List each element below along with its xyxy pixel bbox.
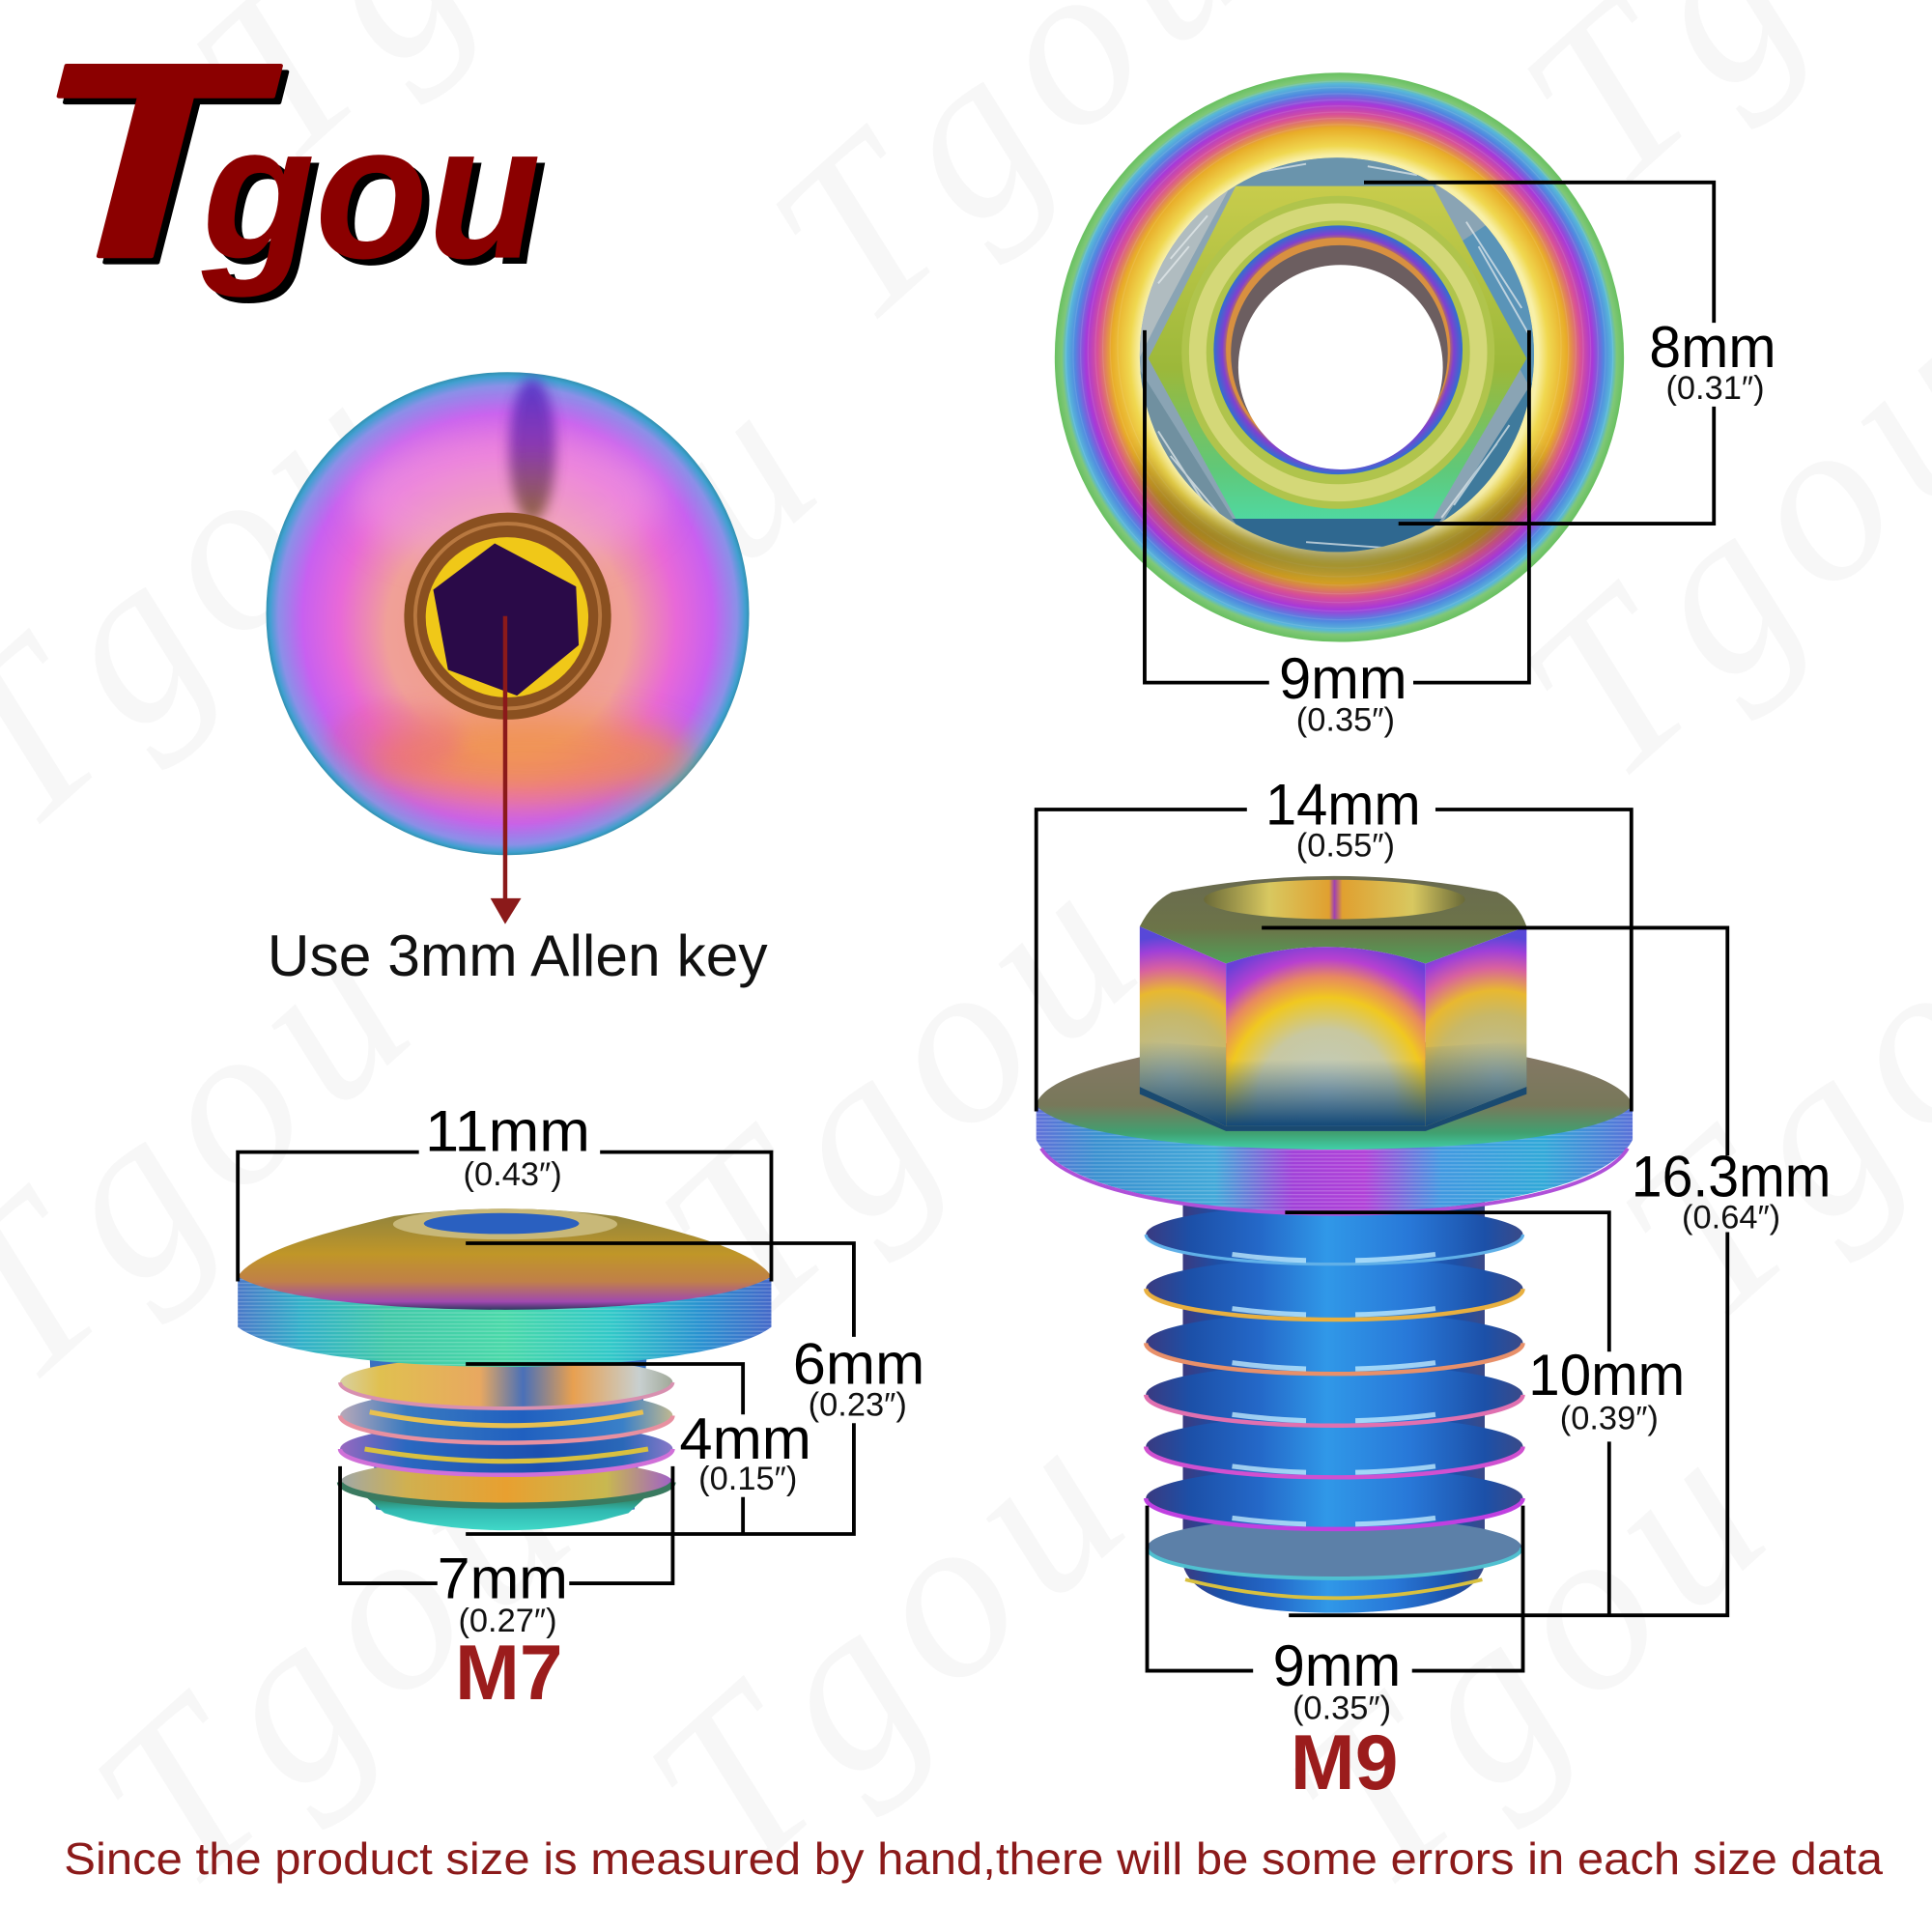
logo: Tgou: T — [33, 5, 283, 315]
dimensions: M9 16.3mm — [1262, 927, 1831, 1615]
nut inner iridescent ring — [1213, 225, 1463, 474]
dimensions: M7 6mm: 6mm — [793, 1331, 924, 1396]
dimensions: nut 8mm: 8mm — [1649, 315, 1776, 380]
dimensions: M9 9mm: (0.35″) — [1293, 1690, 1391, 1726]
M9 flange top — [1037, 1038, 1633, 1150]
M7 domed head — [238, 1208, 771, 1310]
dimensions: nut 8mm — [1364, 183, 1776, 524]
dimensions: M7 7mm: 7mm — [438, 1546, 568, 1610]
hex socket — [433, 543, 579, 696]
M7 end cap — [366, 1497, 645, 1530]
dimensions: M9 9mm: 9mm — [1273, 1634, 1401, 1698]
dimensions: M9 16.3mm: 16.3mm — [1632, 1145, 1831, 1209]
dimensions: M7 7mm — [340, 1466, 672, 1639]
panel: M7 bolt head top view — [267, 372, 750, 855]
logo: Tgou: gou — [201, 85, 541, 298]
nut outer iridescent flange — [1055, 72, 1624, 642]
watermark pattern: Tgou — [1241, 1375, 1823, 1932]
dimensions: M9 10mm: (0.39″) — [1560, 1401, 1659, 1437]
M7 threaded core — [370, 1355, 647, 1519]
dimensions: nut 8mm: (0.31″) — [1665, 370, 1765, 407]
footer note: Since the product size is measured by hand,there will be some errors in each size data — [64, 1833, 1883, 1884]
dimensions: M7 4mm: (0.15″) — [698, 1461, 797, 1497]
label: M7: M7 — [455, 1630, 563, 1717]
dimensions: nut 9mm: (0.35″) — [1296, 701, 1395, 738]
dimensions: M7 4mm: 4mm — [679, 1406, 811, 1471]
M9 end chamfer line — [1185, 1579, 1482, 1598]
socket bronze ring — [404, 513, 611, 720]
dimensions: M7 11mm: 11mm — [425, 1098, 590, 1163]
panel: M9 bolt side view — [1037, 876, 1633, 1613]
dimensions: M7 6mm: (0.23″) — [809, 1387, 907, 1424]
watermark pattern: Tgou — [612, 809, 1195, 1369]
M9 threads — [1146, 1205, 1523, 1578]
M7 threads — [340, 1356, 672, 1506]
M7 flange band — [238, 1276, 771, 1367]
dimensions: M7 4mm — [466, 1364, 811, 1534]
M9 thread core — [1182, 1202, 1485, 1613]
logo: Tgou: gou — [209, 91, 549, 304]
M9 left face — [1140, 926, 1226, 1126]
dimensions: M9 14mm: 14mm — [1265, 772, 1421, 837]
dimensions: M7 11mm: (0.43″) — [464, 1156, 562, 1193]
logo: Tgou: T — [40, 12, 289, 322]
dimensions: M7 7mm: (0.27″) — [458, 1603, 557, 1639]
nut hexagon — [1149, 186, 1526, 519]
M9 hex top — [1140, 876, 1526, 963]
logo: Tgou — [33, 5, 549, 322]
panel: flange nut top view — [1055, 72, 1624, 642]
dimensions: M9 10mm — [1285, 1212, 1685, 1615]
M9 flange band — [1037, 1105, 1633, 1214]
dimensions: M7 6mm — [466, 1243, 924, 1534]
arrow: to hex socket — [491, 616, 522, 924]
watermark pattern: Tgou — [600, 1363, 1182, 1923]
dimensions: M7 11mm — [238, 1098, 771, 1282]
M9 centre face — [1226, 947, 1426, 1126]
M9 hex shadow — [1140, 1060, 1526, 1131]
cap disc — [267, 372, 750, 855]
M9 right face — [1426, 926, 1526, 1126]
label: M9: M9 — [1291, 1719, 1398, 1806]
M7 socket rim — [393, 1208, 617, 1239]
dimensions: M9 10mm: 10mm — [1528, 1343, 1685, 1407]
panel: M7 bolt side view — [238, 1208, 771, 1530]
dimensions: nut 9mm — [1145, 330, 1529, 738]
dimensions: M9 14mm — [1037, 772, 1632, 1112]
dimensions: M9 14mm: (0.55″) — [1296, 827, 1395, 864]
M9 thread highlights — [1233, 1254, 1435, 1524]
dimensions: M9 16.3mm: (0.64″) — [1682, 1200, 1780, 1236]
nut chamfer ring — [1181, 196, 1494, 509]
callout: Allen key: Use 3mm Allen key — [268, 923, 768, 988]
socket yellow inner — [426, 537, 588, 697]
watermark pattern: Tgou — [293, 327, 874, 888]
nut recessed hex seat — [1140, 157, 1534, 552]
M9 hex socket — [1204, 880, 1465, 920]
watermark pattern: Tgou — [45, 1375, 628, 1932]
dimensions: nut 9mm: 9mm — [1279, 646, 1407, 711]
M7 socket — [424, 1213, 579, 1234]
dimensions: M9 9mm — [1148, 1506, 1523, 1726]
nut through hole — [1238, 265, 1443, 469]
